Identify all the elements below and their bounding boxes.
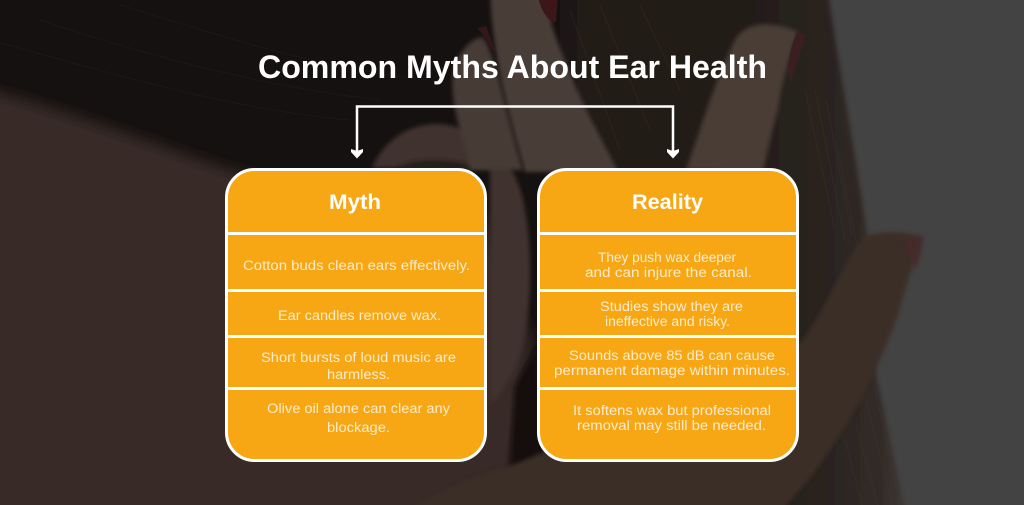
myth row 3: harmless. — [327, 367, 390, 382]
cheek — [0, 88, 532, 505]
title: Common Myths About Ear Health — [258, 49, 767, 85]
reality row 3 — [554, 348, 790, 378]
ear — [372, 124, 530, 405]
hair strands — [570, 5, 900, 505]
fingers top — [452, 37, 523, 170]
reality row 2: Studies show they are — [600, 299, 743, 314]
myth row 3: Short bursts of loud music are — [261, 350, 456, 365]
reality row 4: It softens wax but professional — [573, 403, 771, 418]
myth row 3 — [261, 350, 456, 382]
reality row 1: and can injure the canal. — [585, 265, 752, 280]
myth row 2: Ear candles remove wax. — [278, 308, 441, 323]
reality row 2 — [600, 299, 743, 329]
reality row 1: They push wax deeper — [598, 250, 736, 265]
nails — [538, 0, 558, 22]
lower hand — [395, 232, 920, 505]
right hair — [530, 0, 908, 505]
panel: reality — [538, 170, 798, 460]
reality row 3: permanent damage within minutes. — [554, 363, 790, 378]
myth row 4: blockage. — [327, 420, 390, 435]
dark gap behind ear — [510, 345, 538, 470]
myth row 4 — [267, 401, 450, 435]
reality row 4 — [573, 403, 771, 433]
panel: myth — [226, 170, 486, 460]
reality row 2: ineffective and risky. — [605, 314, 730, 329]
heading: myth: Myth — [329, 191, 381, 214]
myth row 4: Olive oil alone can clear any — [267, 401, 450, 416]
reality row 3: Sounds above 85 dB can cause — [569, 348, 775, 363]
myth row 1: Cotton buds clean ears effectively. — [243, 258, 470, 273]
top-left hair — [0, 0, 560, 505]
connector arrows — [351, 106, 679, 158]
reality row 4: removal may still be needed. — [577, 418, 766, 433]
heading: reality: Reality — [632, 191, 703, 214]
reality row 1 — [585, 250, 752, 280]
